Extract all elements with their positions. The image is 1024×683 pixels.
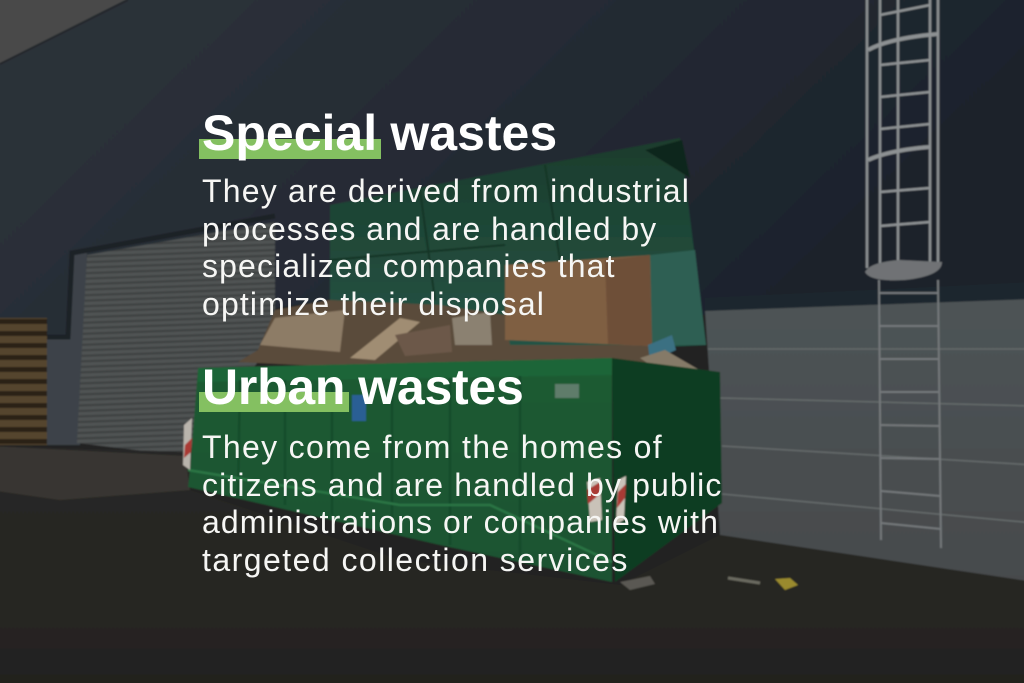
text block: urban wastes description: citizens and are handled by public <box>202 466 723 502</box>
text block: urban wastes description: They come from the homes of <box>202 429 663 465</box>
text block: special wastes description: processes and are handled by <box>202 210 657 246</box>
text block: special wastes description: optimize their disposal <box>202 286 545 322</box>
heading: Special wastes: Special wastes <box>202 105 557 161</box>
highlight: Urban <box>199 392 349 412</box>
text block: urban wastes description: administrations or companies with <box>202 504 719 540</box>
text block: special wastes description: They are derived from industrial <box>202 173 690 209</box>
text block: special wastes description: specialized companies that <box>202 248 616 284</box>
highlight: Special <box>199 139 381 159</box>
text block: special wastes description <box>202 173 690 322</box>
heading: Urban wastes: Urban wastes <box>202 359 524 415</box>
text block: urban wastes description: targeted collection services <box>202 542 629 578</box>
text block: urban wastes description <box>202 429 723 578</box>
